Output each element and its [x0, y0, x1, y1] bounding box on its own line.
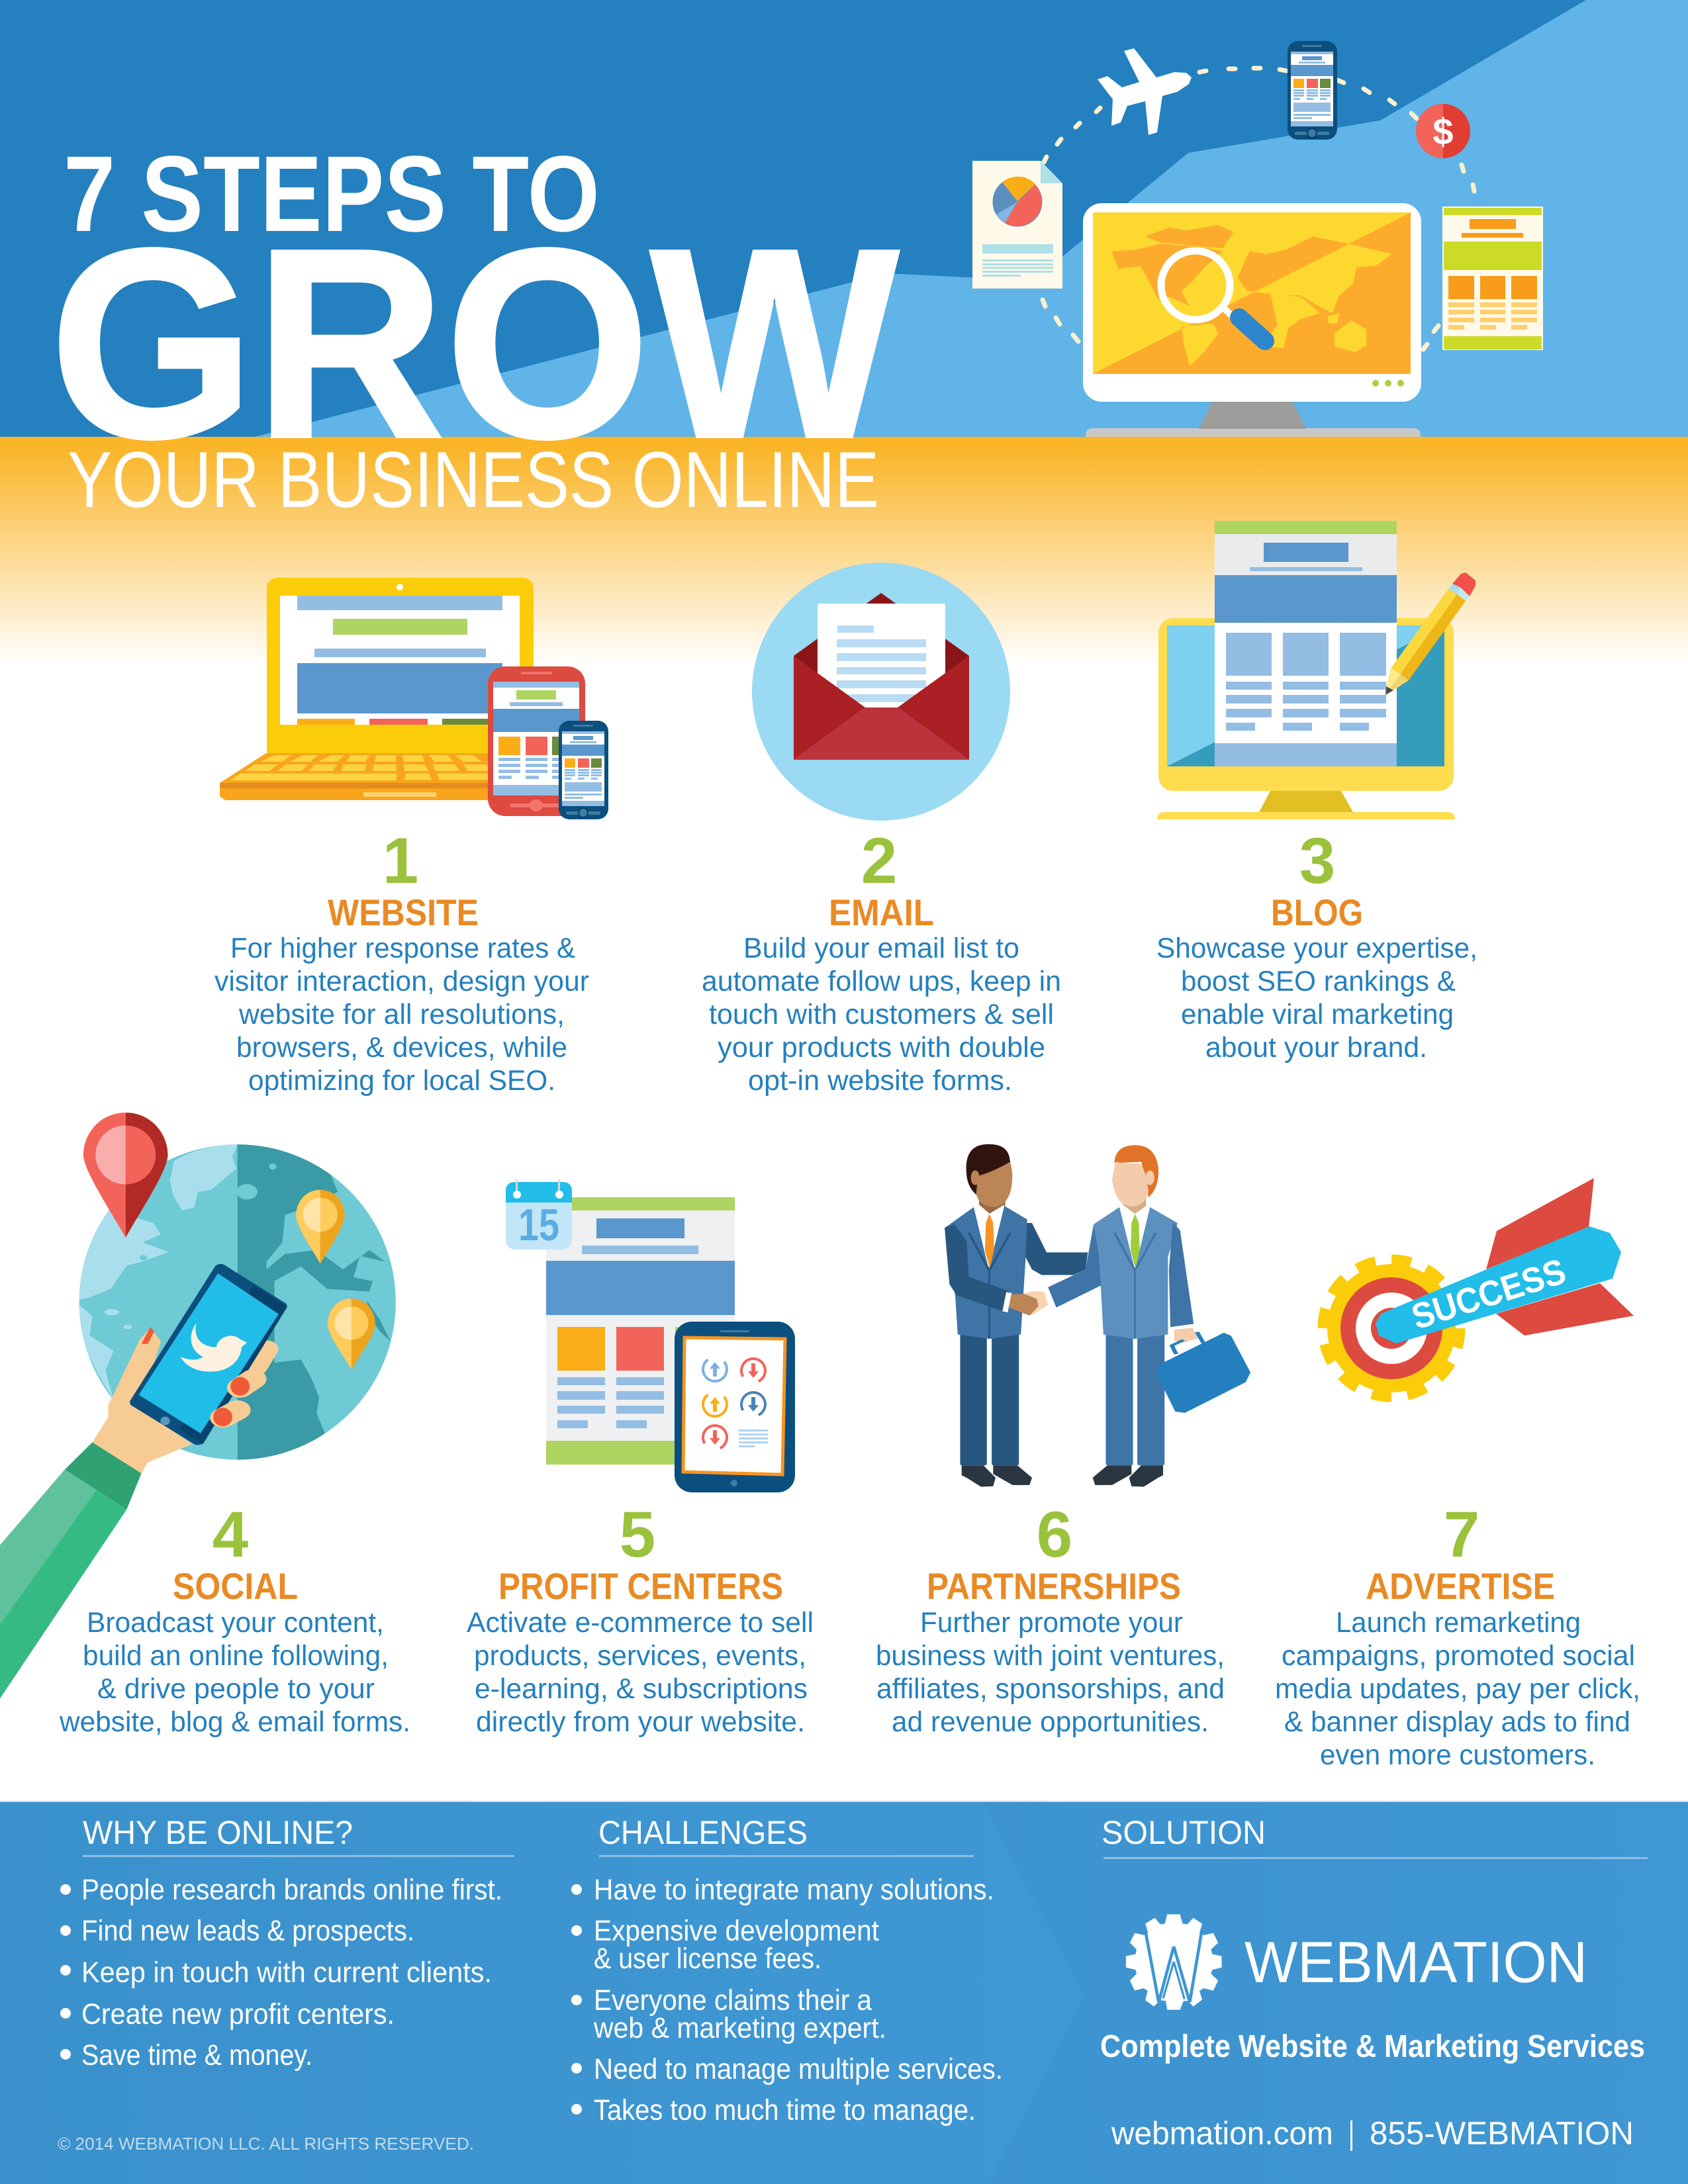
panel: challenges: Need to manage multiple services.: [594, 2053, 1003, 2085]
step 7: advertise: campaigns, promoted social: [1282, 1640, 1635, 1672]
step 6: partnerships: ad revenue opportunities.: [892, 1706, 1209, 1738]
step 3: blog: boost SEO rankings &: [1181, 966, 1456, 997]
step 7: advertise: even more customers.: [1320, 1739, 1595, 1771]
icon: airplane: [1098, 48, 1192, 135]
step 6: partnerships: 6: [1037, 1498, 1072, 1570]
step 1: website: optimizing for local SEO.: [248, 1065, 555, 1097]
step 3: blog: about your brand.: [1205, 1032, 1427, 1064]
step 2: email: your products with double: [718, 1032, 1045, 1064]
sleeve: [0, 1442, 142, 1698]
icon: yellow map pin: [328, 1298, 375, 1370]
step 2: email: 2: [861, 824, 897, 897]
panel: why be online: Save time & money.: [81, 2039, 312, 2071]
step 1: website: browsers, & devices, while: [236, 1032, 567, 1064]
panel: solution: [1100, 1814, 1648, 2152]
step 7: advertise: [1275, 1498, 1640, 1771]
step 4: social: build an online following,: [83, 1640, 389, 1672]
orange gradient band: [0, 437, 1688, 665]
icon: blog monitor with pencil: [1157, 521, 1476, 819]
step 3: blog: enable viral marketing: [1181, 999, 1454, 1030]
icon: yellow map pin: [296, 1190, 345, 1263]
icon: hero smartphone: [1288, 41, 1337, 140]
step 7: advertise: media updates, pay per click,: [1275, 1673, 1640, 1705]
icon: webmation gear logo: [1126, 1914, 1222, 2010]
title: YOUR BUSINESS ONLINE: [68, 435, 879, 524]
step 6: partnerships: [876, 1498, 1225, 1738]
panel: challenges: & user license fees.: [594, 1942, 821, 1975]
step 2: email: automate follow ups, keep in: [702, 966, 1061, 997]
step 5: profit centers: e-learning, & subscriptions: [475, 1673, 808, 1705]
hero background: [0, 0, 1688, 438]
icon: calendar: [506, 1179, 572, 1250]
step 1: website: WEBSITE: [328, 891, 479, 933]
panel: challenges: Have to integrate many solutions.: [594, 1874, 994, 1906]
icon: businessmen shaking hands: [945, 1144, 1250, 1486]
step 4: social: SOCIAL: [173, 1565, 298, 1607]
step 3: blog: Showcase your expertise,: [1156, 933, 1477, 964]
step 1: website: [214, 824, 589, 1097]
icon: landing page document: [1442, 206, 1543, 350]
icon: dollar coin: $: [1432, 111, 1454, 152]
step 4: social: website, blog & email forms.: [59, 1706, 410, 1738]
tagline: Complete Website & Marketing Services: [1100, 2029, 1645, 2064]
step 2: email: EMAIL: [829, 891, 934, 933]
panel: challenges: [571, 1814, 1003, 2126]
contact details: webmation.com: [1111, 2116, 1333, 2152]
contact details: 855-WEBMATION: [1370, 2116, 1634, 2152]
step 6: partnerships: business with joint ventures,: [876, 1640, 1225, 1672]
step 7: advertise: & banner display ads to find: [1284, 1706, 1630, 1738]
panel: challenges: Everyone claims their a: [594, 1984, 872, 2017]
panel: why be online: Keep in touch with current clients.: [81, 1956, 492, 1989]
panel: why be online: People research brands online first.: [81, 1874, 502, 1906]
hero illustration: dashed path: [1043, 68, 1474, 349]
step 2: email: opt-in website forms.: [748, 1065, 1012, 1097]
panel: challenges: Takes too much time to manage.: [594, 2094, 976, 2126]
footer panel background: [0, 1801, 1688, 2184]
icon: tablet: [675, 1322, 795, 1492]
step 3: blog: BLOG: [1271, 891, 1363, 933]
panel: challenges: CHALLENGES: [598, 1814, 808, 1851]
icon: laptop and phones: [220, 578, 608, 819]
step 5: profit centers: Activate e-commerce to sell: [467, 1607, 814, 1639]
step 5: profit centers: directly from your website.: [476, 1706, 805, 1738]
step 4: social: & drive people to your: [97, 1673, 375, 1705]
left businessman: [945, 1144, 1088, 1486]
copyright: © 2014 WEBMATION LLC. ALL RIGHTS RESERVED.: [58, 2134, 474, 2154]
icon: navy smartphone: [559, 721, 608, 819]
icon: success target and arrow: [1323, 1178, 1634, 1397]
icon: dollar coin: [1416, 104, 1470, 158]
step 7: advertise: ADVERTISE: [1366, 1565, 1555, 1607]
panel: challenges: Expensive development: [594, 1915, 879, 1947]
step 3: blog: [1156, 824, 1477, 1064]
contact details: [1111, 2116, 1634, 2152]
icon: briefcase: [1156, 1332, 1250, 1413]
icon: pie chart document: [972, 161, 1062, 289]
step 5: profit centers: [467, 1498, 814, 1738]
panel: why be online: WHY BE ONLINE?: [83, 1814, 353, 1851]
step 2: email: [702, 824, 1061, 1097]
webmation wordmark: WEBMATION: [1244, 1929, 1587, 1995]
icon: success target and arrow: SUCCESS: [1407, 1251, 1570, 1337]
step 1: website: 1: [383, 824, 418, 897]
panel: solution: SOLUTION: [1102, 1814, 1266, 1851]
title: GROW: [50, 193, 902, 494]
step 6: partnerships: PARTNERSHIPS: [927, 1565, 1181, 1607]
hand: [93, 1327, 267, 1473]
step 4: social: 4: [212, 1498, 248, 1570]
handshake: [1002, 1291, 1048, 1316]
step 1: website: For higher response rates &: [230, 933, 575, 964]
panel: why be online: [60, 1814, 514, 2071]
step 2: email: touch with customers & sell: [709, 999, 1054, 1030]
step 7: advertise: 7: [1444, 1498, 1479, 1570]
right businessman: [1048, 1145, 1199, 1486]
step 3: blog: 3: [1299, 824, 1335, 897]
fingers: [213, 1377, 254, 1426]
icon: calendar: 15: [518, 1200, 559, 1250]
icon: open envelope: [752, 563, 1010, 821]
phone with twitter bird: [136, 1269, 287, 1444]
step 4: social: [59, 1498, 410, 1738]
panel: challenges: web & marketing expert.: [593, 2012, 886, 2044]
icon: profit center web page: [506, 1179, 795, 1492]
step 5: profit centers: 5: [620, 1498, 655, 1570]
step 5: profit centers: PROFIT CENTERS: [498, 1565, 783, 1607]
step 7: advertise: Launch remarketing: [1336, 1607, 1581, 1639]
icon: social globe with hand and phone: [0, 1113, 396, 1698]
step 1: website: website for all resolutions,: [238, 999, 565, 1030]
step 4: social: Broadcast your content,: [87, 1607, 384, 1639]
icon: hero monitor with world map: [1083, 203, 1421, 437]
step 2: email: Build your email list to: [743, 933, 1019, 964]
title: 7 STEPS TO: [64, 133, 600, 254]
icon: red map pin: [83, 1113, 168, 1238]
step 1: website: visitor interaction, design your: [214, 966, 589, 997]
panel: why be online: Find new leads & prospects.: [81, 1915, 414, 1947]
panel: why be online: Create new profit centers.: [81, 1998, 395, 2030]
step 6: partnerships: affiliates, sponsorships, and: [876, 1673, 1225, 1705]
step 6: partnerships: Further promote your: [920, 1607, 1183, 1639]
icon: pencil: [1385, 572, 1476, 695]
step 5: profit centers: products, services, events,: [474, 1640, 806, 1672]
